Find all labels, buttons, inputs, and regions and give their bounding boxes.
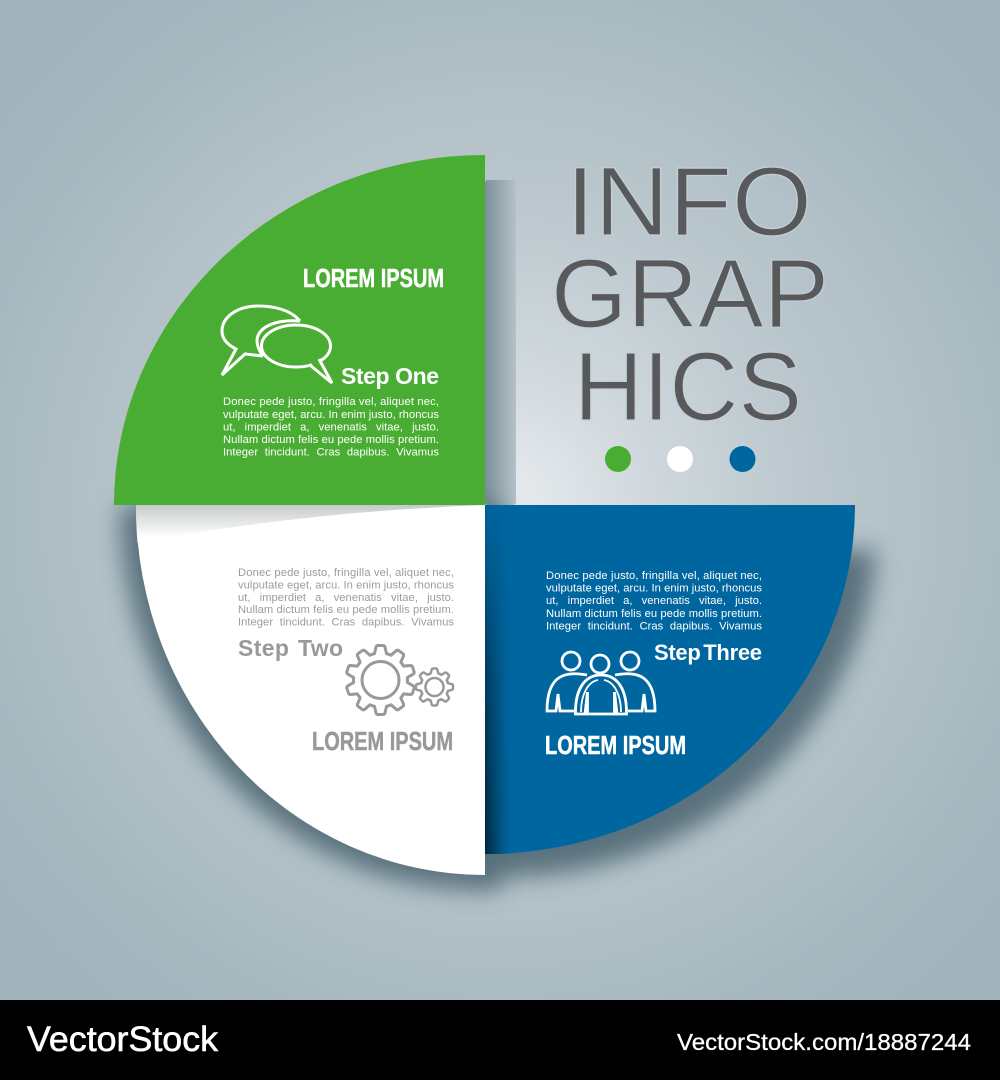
small gear [416,668,453,706]
shadow under blue panel [485,550,876,877]
title [551,147,829,441]
title: INFO [566,147,812,256]
blue quarter [485,505,855,854]
body text: Nullam dictum felis eu pede mollis pretium. [546,608,762,620]
step label: Step One [341,363,439,389]
large gear [345,646,416,714]
body text [223,396,439,458]
body text: Integer tincidunt. Cras dapibus. Vivamus [223,446,439,458]
icon: people [547,652,655,714]
title: HICS [574,332,802,441]
panel: step two white [136,505,485,875]
legend dots [605,446,756,472]
body text: vulputate eget, arcu. In enim justo, rhoncus [546,582,762,594]
shadow under white panel [120,505,500,890]
body text [238,567,454,628]
panel: step three blue [485,505,855,854]
heading: LOREM IPSUM [545,730,686,760]
body text: vulputate eget, arcu. In enim justo, rhoncus [238,580,454,592]
shadow strip behind green panel [485,180,516,505]
body text: Integer tincidunt. Cras dapibus. Vivamus [238,616,454,628]
curl shadow [136,505,485,543]
body text: ut, imperdiet a, venenatis vitae, justo. [223,422,439,434]
heading: LOREM IPSUM [303,263,444,293]
body text: Donec pede justo, fringilla vel, aliquet nec, [546,570,762,582]
body text: Integer tincidunt. Cras dapibus. Vivamus [546,620,762,632]
green quarter [114,155,485,505]
footer bar [0,1000,1000,1080]
step label: Step Three [654,640,762,665]
title: GRAP [551,239,829,348]
white quarter [136,505,485,875]
icon: speech bubbles [222,306,332,383]
body text: ut, imperdiet a, venenatis vitae, justo. [238,592,454,604]
body text: Donec pede justo, fringilla vel, aliquet nec, [238,567,454,579]
url: VectorStock.com/18887244 [677,1029,971,1055]
body text: Nullam dictum felis eu pede mollis pretium. [238,604,454,616]
heading: LOREM IPSUM [312,726,453,756]
panel: step one green [114,155,485,505]
body text: Nullam dictum felis eu pede mollis pretium. [223,434,439,446]
body text: ut, imperdiet a, venenatis vitae, justo. [546,595,762,607]
body text: vulputate eget, arcu. In enim justo, rhoncus [223,409,439,421]
icon: gears [345,646,453,714]
step label: Step Two [238,635,343,661]
body text: Donec pede justo, fringilla vel, aliquet nec, [223,396,439,408]
body text [546,570,762,632]
inner edge shadow [485,505,515,854]
brand: VectorStock [27,1020,219,1059]
